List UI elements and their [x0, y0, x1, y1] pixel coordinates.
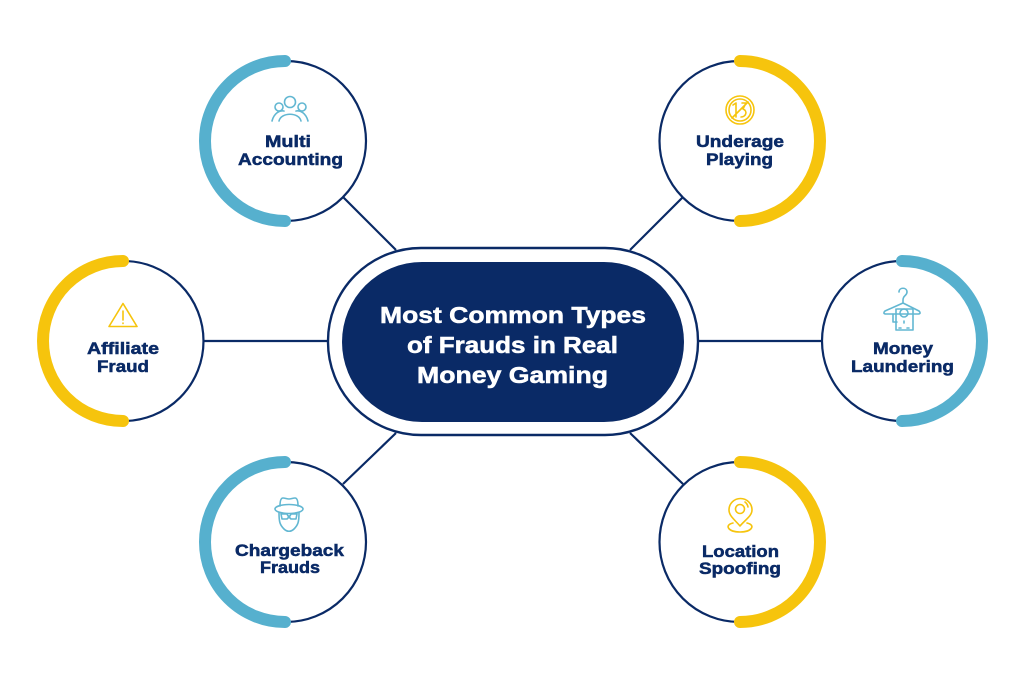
label: Laundering [851, 358, 954, 376]
label [235, 542, 345, 577]
label [699, 543, 781, 578]
label: Fraud [97, 358, 149, 376]
node: Money Laundering [822, 261, 982, 421]
icon: hanger with banknote [884, 288, 920, 330]
label [87, 340, 159, 376]
label: Playing [706, 151, 773, 169]
icon: no under 18 [726, 96, 754, 124]
node: Underage Playing [660, 61, 820, 221]
label: Multi [265, 133, 311, 151]
label: Frauds [260, 559, 320, 577]
icon: people [272, 96, 308, 121]
title: of Frauds in Real [407, 332, 618, 358]
label: Spoofing [699, 560, 781, 578]
icon: masked figure in hat [275, 498, 303, 531]
label: Affiliate [87, 340, 159, 358]
label: Underage [696, 133, 784, 151]
label [238, 133, 343, 169]
label: Location [702, 543, 779, 561]
title: Most Common Types [380, 302, 646, 328]
title: Money Gaming [417, 362, 608, 388]
icon: warning [109, 304, 137, 326]
node: Multi Accounting [205, 61, 366, 221]
title [380, 302, 646, 388]
node: Affiliate Fraud [43, 261, 204, 421]
node: Location Spoofing [660, 462, 820, 622]
label: Money [873, 340, 934, 358]
central pill [328, 248, 698, 435]
label: Accounting [238, 151, 343, 169]
icon: location pin [728, 499, 752, 532]
label [851, 340, 954, 376]
label [696, 133, 784, 169]
connector lines [204, 197, 822, 484]
node: Chargeback Frauds [205, 462, 366, 622]
label: Chargeback [235, 542, 345, 560]
